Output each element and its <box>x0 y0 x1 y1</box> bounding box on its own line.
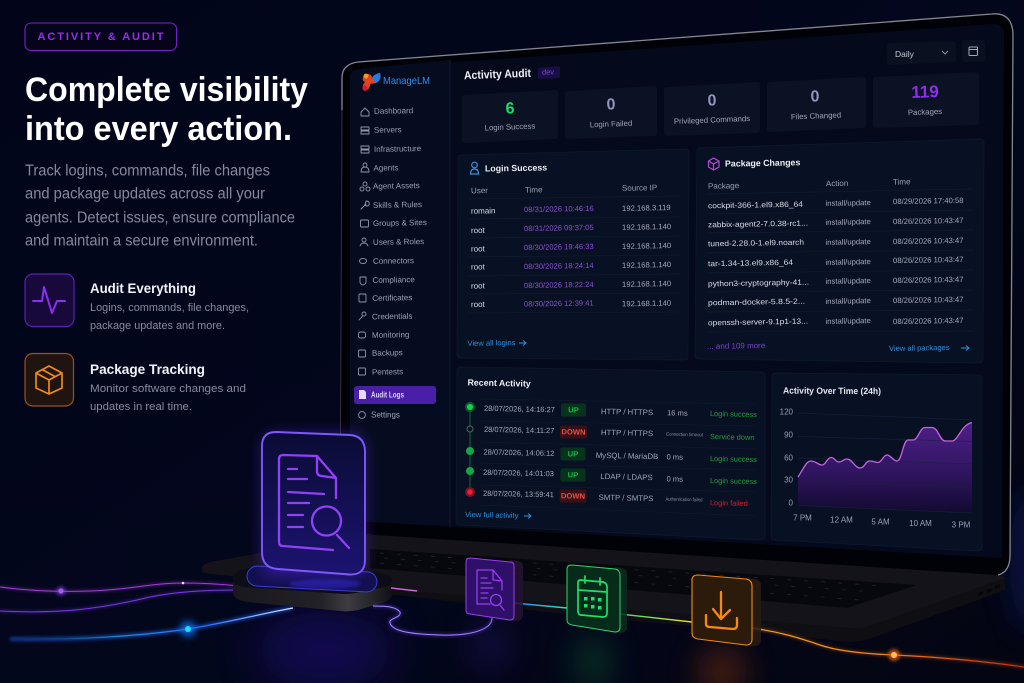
table header: Action <box>826 179 848 188</box>
row 4: 0 ms <box>666 474 683 484</box>
stat card: login failed <box>565 86 657 139</box>
y axis labels: 30 <box>784 476 794 484</box>
navigation items: Skills & Rules <box>373 200 422 210</box>
row 1: UP <box>568 405 579 415</box>
date controls: Daily <box>895 49 915 59</box>
stat card: privileged commands: Privileged Commands <box>674 114 750 126</box>
row 3: Login success <box>710 454 757 464</box>
table rows: root <box>471 226 486 235</box>
row 4: LDAP / LDAPS <box>600 472 653 482</box>
big document icon on pedestal <box>233 432 392 611</box>
x axis labels <box>793 514 971 530</box>
row 5: Authentication failed <box>665 497 703 503</box>
navigation items: Credentials <box>372 312 413 321</box>
icon: package box <box>25 354 74 406</box>
row 2 <box>484 425 754 442</box>
light wires right <box>373 588 1024 667</box>
orange node <box>888 649 900 661</box>
table rows: romain <box>471 206 496 216</box>
row 3: 28/07/2026, 14:06:12 <box>483 447 554 458</box>
y axis labels <box>780 408 794 508</box>
table rows: 08/31/2026 09:37:05 <box>524 223 594 233</box>
description <box>25 162 295 250</box>
panel: recent activity <box>456 367 765 540</box>
title: Complete visibility <box>25 71 308 109</box>
settings item: Settings <box>371 410 400 420</box>
table rows: 08/26/2026 10:43:47 <box>893 255 964 265</box>
row 2: DOWN <box>561 427 586 437</box>
table rows: 192.168.1.140 <box>622 241 671 251</box>
active item: Audit Logs <box>354 386 436 404</box>
navigation items: Dashboard <box>374 106 413 116</box>
navigation items: Compliance <box>372 275 415 285</box>
page title: dev <box>542 67 555 77</box>
x axis labels: 3 PM <box>952 520 971 530</box>
heading: Recent Activity <box>467 377 531 389</box>
heading badge: ACTIVITY & AUDIT <box>38 31 164 43</box>
x axis labels: 10 AM <box>909 519 932 528</box>
table header: Time <box>525 185 543 195</box>
stat card: packages: 119 <box>911 82 939 102</box>
text block: Monitor software changes and <box>90 383 246 395</box>
stat card: packages <box>873 72 979 128</box>
table rows: cockpit-366-1.el9.x86_64 <box>708 200 804 210</box>
stat card: packages: Packages <box>908 107 942 117</box>
logo: ManageLM <box>362 73 430 91</box>
floating glow reflections <box>466 619 748 683</box>
pedestal <box>233 566 392 611</box>
active item: Audit Logs: Audit Logs <box>371 390 404 400</box>
stat card: files changed <box>767 77 866 132</box>
row 4: UP <box>568 470 578 480</box>
row 1: HTTP / HTTPS <box>601 407 653 417</box>
row lines <box>707 189 973 332</box>
heading: Package Changes <box>725 157 800 169</box>
navigation items: Users & Roles <box>373 237 424 247</box>
icon: user <box>470 162 478 174</box>
row 1: 16 ms <box>667 408 688 418</box>
table rows: zabbix-agent2-7.0.38-rc1... <box>708 219 808 229</box>
area fill <box>798 422 972 513</box>
icon: cube <box>708 158 719 170</box>
row 5: SMTP / SMTPS <box>598 493 654 503</box>
description: agents. Detect issues, ensure compliance <box>25 210 295 226</box>
x axis labels: 12 AM <box>830 516 853 524</box>
table rows: install/update <box>825 237 871 247</box>
title: into every action. <box>25 110 292 148</box>
stat card: login success: 6 <box>505 100 515 118</box>
table rows: 08/26/2026 10:43:47 <box>893 275 964 285</box>
navigation items: Agent Assets <box>373 181 420 191</box>
table rows: 192.168.1.140 <box>622 260 671 270</box>
table rows <box>708 196 964 327</box>
icon: floating download <box>692 575 761 646</box>
row 2: 28/07/2026, 14:11:27 <box>484 425 554 435</box>
glow <box>262 433 365 575</box>
table rows: 08/30/2026 18:24:14 <box>524 261 594 271</box>
row 3 <box>483 447 757 464</box>
panel: login success <box>457 149 689 360</box>
feature: package tracking <box>25 354 246 413</box>
heading: Login Success <box>485 162 547 174</box>
glass tile <box>262 432 365 575</box>
sidebar <box>350 60 450 527</box>
row 3: MySQL / MariaDB <box>596 451 658 461</box>
document glyph <box>279 455 349 550</box>
glow: right edge ambient <box>1010 490 1024 630</box>
table rows: 08/30/2026 18:22:24 <box>524 280 594 290</box>
page title: Activity Audit <box>464 68 531 82</box>
table rows: 08/29/2026 17:40:58 <box>893 196 964 206</box>
heading: Activity Over Time (24h) <box>783 386 881 396</box>
table rows: openssh-server-9.1p1-13... <box>708 317 808 327</box>
y axis labels: 120 <box>780 408 794 416</box>
stat card: privileged commands <box>664 82 760 136</box>
table rows: 192.168.1.140 <box>622 222 671 232</box>
table rows: root <box>471 262 486 272</box>
glow: floor under document icon <box>257 612 393 683</box>
table header: Source IP <box>622 183 657 193</box>
table rows: install/update <box>825 217 871 227</box>
row 4: Login success <box>710 476 757 486</box>
table header: Package <box>708 181 740 191</box>
navigation items: Servers <box>374 125 402 135</box>
icon: pulse <box>25 274 74 326</box>
text block: package updates and more. <box>90 320 225 332</box>
navigation items <box>358 106 427 377</box>
table rows: tar-1.34-13.el9.x86_64 <box>708 258 794 268</box>
table rows <box>471 203 671 309</box>
link: view full activity: View full activity <box>465 510 519 520</box>
y axis labels: 90 <box>784 430 794 440</box>
description: and package updates across all your <box>25 186 265 202</box>
row 2: HTTP / HTTPS <box>601 428 653 438</box>
more count: ... and 109 more <box>707 341 766 351</box>
table header <box>708 177 911 191</box>
navigation items: Pentests <box>372 367 403 377</box>
stat card: login failed: Login Failed <box>590 119 632 129</box>
table rows: 08/26/2026 10:43:47 <box>893 236 964 246</box>
stat card: login success <box>462 90 558 143</box>
line series <box>798 422 972 477</box>
x axis labels: 5 AM <box>871 518 890 526</box>
row 5: DOWN <box>561 491 585 501</box>
table rows: 192.168.1.140 <box>622 299 671 308</box>
light nodes <box>56 582 196 637</box>
link: view all packages: View all packages <box>889 343 950 353</box>
description: and maintain a secure environment. <box>25 232 258 250</box>
description: Track logins, commands, file changes <box>25 162 270 180</box>
stat card: login failed: 0 <box>606 96 616 114</box>
x axis labels: 7 PM <box>793 514 812 522</box>
settings item <box>359 410 400 420</box>
row 4 <box>483 468 757 486</box>
date controls <box>887 40 985 65</box>
table rows: root <box>471 281 486 291</box>
stat card: login success: Login Success <box>484 122 536 132</box>
row 1: 28/07/2026, 14:16:27 <box>484 404 555 414</box>
table rows: root <box>471 300 486 309</box>
table rows: install/update <box>825 257 871 267</box>
logo: ManageLM: ManageLM <box>383 75 430 87</box>
icon: floating audit document <box>466 558 523 621</box>
row 1: Login success <box>710 409 757 419</box>
row 4: 28/07/2026, 14:01:03 <box>483 468 554 478</box>
table rows: podman-docker-5.8.5-2... <box>708 297 805 307</box>
table rows: 192.168.3.119 <box>622 203 671 213</box>
table header <box>471 183 657 195</box>
laptop base and keyboard <box>202 533 1005 642</box>
table rows: 08/30/2026 19:46:33 <box>524 242 594 252</box>
navigation items: Connectors <box>373 256 414 266</box>
row 3: 0 ms <box>666 452 683 462</box>
feature: audit everything <box>25 274 249 332</box>
navigation items: Groups & Sites <box>373 218 427 228</box>
text block: updates in real time. <box>90 401 192 413</box>
table rows: install/update <box>825 316 871 326</box>
table rows: 08/26/2026 10:43:47 <box>893 216 964 226</box>
icon: floating calendar <box>567 565 627 633</box>
navigation items: Monitoring <box>372 330 409 340</box>
stat card: files changed: Files Changed <box>791 111 841 121</box>
table rows: tuned-2.28.0-1.el9.noarch <box>708 238 804 248</box>
laptop screen <box>340 14 1013 575</box>
table rows: install/update <box>825 198 871 208</box>
navigation items: Agents <box>373 163 398 173</box>
navigation items: Certificates <box>372 293 412 303</box>
table rows: 08/30/2026 12:39:41 <box>524 298 594 309</box>
row 5 <box>483 489 748 508</box>
y axis labels: 0 <box>789 498 794 508</box>
table rows: 08/26/2026 10:43:47 <box>893 316 964 326</box>
heading badge <box>25 23 176 50</box>
stat card: privileged commands: 0 <box>707 92 717 110</box>
table rows: 192.168.1.140 <box>622 279 671 289</box>
grid lines <box>798 413 972 513</box>
row 2: Connection timeout <box>666 432 704 438</box>
text block: Audit Everything <box>90 280 196 296</box>
row 3: UP <box>568 449 578 459</box>
table header: User <box>471 186 488 195</box>
table rows: root <box>471 244 486 254</box>
title <box>25 71 308 148</box>
table rows: install/update <box>825 296 871 306</box>
panel: package changes <box>695 139 984 363</box>
text block: Package Tracking <box>90 361 205 377</box>
y axis labels: 60 <box>784 454 794 462</box>
navigation items: Backups <box>372 348 403 358</box>
stat card: files changed: 0 <box>810 88 820 106</box>
row lines <box>469 196 680 313</box>
row 2: Service down <box>710 432 754 442</box>
link: view all logins: View all logins <box>467 338 516 348</box>
table rows: python3-cryptography-41... <box>708 278 809 288</box>
timeline <box>465 402 475 497</box>
row lines <box>480 399 755 516</box>
navigation items: Infrastructure <box>374 144 422 154</box>
text block <box>90 280 249 332</box>
text block: Logins, commands, file changes, <box>90 302 249 314</box>
light wires left <box>0 583 293 639</box>
row 5: Login failed <box>710 498 748 508</box>
panel: activity over time chart <box>771 373 982 551</box>
row 5: 28/07/2026, 13:59:41 <box>483 489 554 499</box>
row 1 <box>484 404 757 419</box>
table rows: install/update <box>825 276 871 286</box>
text block <box>90 361 246 413</box>
table header: Time <box>893 177 911 187</box>
table rows: 08/26/2026 10:43:47 <box>893 295 964 305</box>
table rows: 08/31/2026 10:46:16 <box>524 204 594 214</box>
